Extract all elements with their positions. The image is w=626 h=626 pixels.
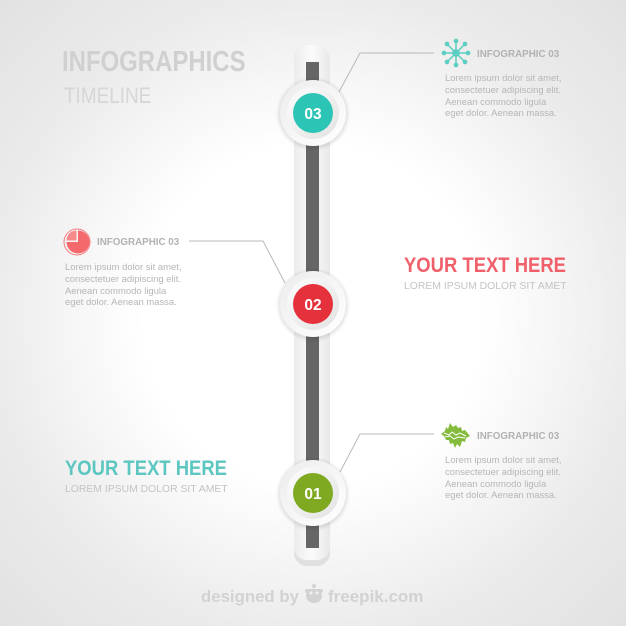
block 01: body text: Aenean commodo ligula bbox=[445, 479, 546, 490]
rail bbox=[294, 45, 330, 566]
block 03: body text: Aenean commodo ligula bbox=[445, 97, 546, 108]
title: INFOGRAPHICS bbox=[62, 46, 246, 78]
freepik logo icon bbox=[305, 584, 323, 603]
subtitle: TIMELINE bbox=[64, 83, 151, 108]
block 02: body text: Aenean commodo ligula bbox=[65, 286, 166, 297]
icon: snowflake network bbox=[442, 39, 470, 67]
node 03: 03 bbox=[304, 106, 322, 123]
block 03: body text: consectetuer adipiscing elit. bbox=[445, 85, 561, 96]
block 03: heading: INFOGRAPHIC 03 bbox=[477, 49, 559, 60]
block 02: heading: INFOGRAPHIC 03 bbox=[97, 237, 179, 248]
block 01: body text: eget dolor. Aenean massa. bbox=[445, 490, 557, 501]
footer: freepik.com: freepik.com bbox=[328, 587, 423, 606]
callout: teal subtext: LOREM IPSUM DOLOR SIT AMET bbox=[65, 484, 228, 495]
block 02: body text bbox=[65, 262, 181, 308]
block 01: body text: consectetuer adipiscing elit. bbox=[445, 467, 561, 478]
node 03 bbox=[278, 79, 348, 149]
block 02: body text: consectetuer adipiscing elit. bbox=[65, 274, 181, 285]
icon: green waveform bbox=[441, 423, 470, 448]
block 01: heading: INFOGRAPHIC 03 bbox=[477, 431, 559, 442]
callout: red heading: YOUR TEXT HERE bbox=[404, 253, 566, 277]
node 01: 01 bbox=[304, 486, 322, 503]
block 03: body text: Lorem ipsum dolor sit amet, bbox=[445, 73, 561, 84]
connector 02 bbox=[189, 241, 285, 283]
block 02: body text: eget dolor. Aenean massa. bbox=[65, 297, 177, 308]
callout: teal heading: YOUR TEXT HERE bbox=[65, 456, 227, 480]
connector 01 bbox=[340, 434, 434, 472]
connector 03 bbox=[339, 53, 434, 92]
block 03: body text bbox=[445, 73, 561, 119]
block 02: body text: Lorem ipsum dolor sit amet, bbox=[65, 262, 181, 273]
node 02 bbox=[278, 270, 348, 340]
node 01 bbox=[278, 459, 348, 529]
block 03: body text: eget dolor. Aenean massa. bbox=[445, 108, 557, 119]
block 01: body text: Lorem ipsum dolor sit amet, bbox=[445, 455, 561, 466]
footer: designed by: designed by bbox=[201, 587, 299, 606]
block 01: body text bbox=[445, 455, 561, 501]
node 02: 02 bbox=[304, 297, 322, 314]
icon: pie chart bbox=[64, 229, 90, 255]
callout: red subtext: LOREM IPSUM DOLOR SIT AMET bbox=[404, 281, 567, 292]
